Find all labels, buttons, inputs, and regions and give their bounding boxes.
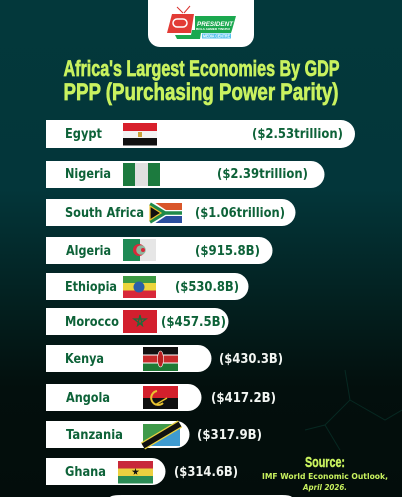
flag: Ghana [118, 461, 153, 484]
bar: Egypt: Egypt [65, 126, 102, 142]
bar: South Africa [46, 199, 296, 226]
flag: Nigeria [123, 163, 160, 186]
bar: Ethiopia: Ethiopia [65, 279, 117, 295]
source note: Source: [305, 454, 345, 471]
bar: Morocco: ($457.5B) [161, 314, 226, 330]
source note: April 2026. [302, 483, 347, 492]
title [64, 56, 340, 106]
bar: Nigeria [46, 161, 324, 188]
bar: South Africa: South Africa [65, 205, 144, 221]
bar: Nigeria: Nigeria [65, 166, 111, 182]
icon: tv logo: BOLA AHMED TINUBU [196, 28, 230, 31]
bar: Ghana: Ghana [65, 464, 106, 480]
flag: Kenya [143, 347, 178, 371]
flag: Tanzania [143, 424, 180, 446]
bar: Tanzania [46, 421, 262, 448]
logo card [148, 0, 254, 47]
icon: tv logo: MEDIA CENTRE [203, 34, 230, 39]
bar: Kenya: ($430.3B) [219, 351, 283, 367]
bar: Ethiopia [46, 273, 248, 300]
bar: Algeria: Algeria [66, 243, 111, 259]
bar: Egypt: ($2.53trillion) [252, 126, 343, 142]
flag: South Africa [150, 203, 182, 223]
bar: Angola: ($417.2B) [211, 390, 276, 406]
bar: Morocco [46, 308, 228, 335]
flag: Morocco [123, 310, 157, 333]
flag: Algeria [123, 239, 156, 261]
bar: Algeria [46, 237, 272, 264]
bar: Nigeria: ($2.39trillion) [217, 166, 308, 182]
faint africa map [305, 370, 402, 450]
bar: Kenya: Kenya [65, 351, 104, 367]
bar: Morocco: Morocco [65, 314, 119, 330]
source note: IMF World Economic Outlook, [262, 472, 388, 481]
source note [262, 454, 388, 492]
bar: Egypt [46, 120, 355, 148]
flag: Egypt [123, 123, 157, 146]
bar: Ethiopia: ($530.8B) [175, 279, 239, 295]
next bar peeking at bottom [110, 495, 292, 497]
bar: Tanzania: ($317.9B) [197, 427, 262, 443]
flag: Angola [143, 386, 178, 409]
flag: Ethiopia [123, 276, 156, 298]
bar: Ghana: ($314.6B) [174, 464, 238, 480]
bar: South Africa: ($1.06trillion) [195, 205, 285, 221]
bar: Algeria: ($915.8B) [195, 243, 260, 259]
icon: tv logo [167, 6, 236, 39]
bar: Kenya [46, 345, 283, 372]
bar: Angola [46, 384, 276, 411]
bar: Tanzania: Tanzania [66, 427, 123, 443]
icon: tv logo: PRESIDENT [197, 22, 234, 28]
bar: Ghana [46, 458, 238, 485]
bar: Angola: Angola [66, 390, 110, 406]
